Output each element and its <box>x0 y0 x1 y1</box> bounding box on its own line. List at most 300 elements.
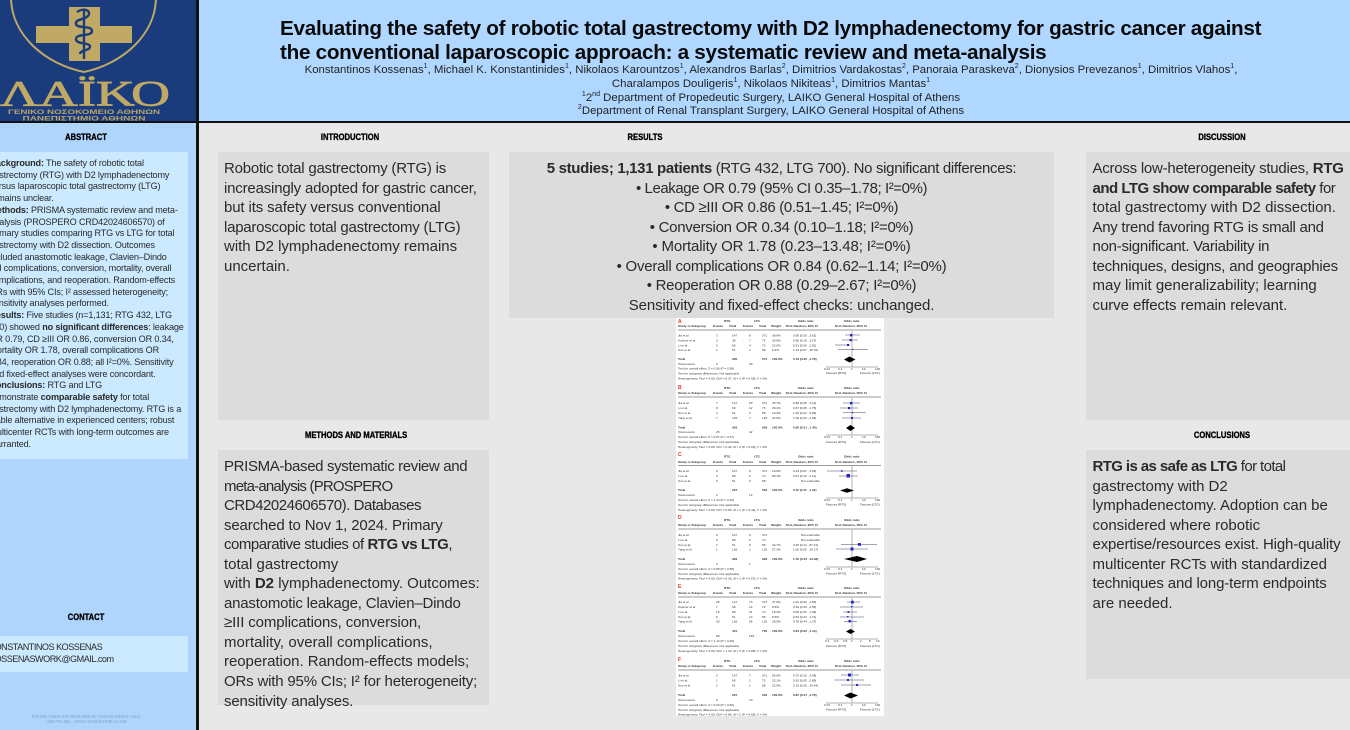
forest plot F: reoperation: 7 <box>749 674 751 678</box>
authors: Charalampos Douligeris1, Nikolaos Nikiteas1, Dimitrios Mantas1 <box>612 77 930 90</box>
forest plot E: overall complications: 700 <box>762 629 767 633</box>
forest plot D: mortality: 100.0% <box>772 557 783 561</box>
forest plot B: complications grade III or above: 10 <box>862 435 866 439</box>
discussion text: Any trend favoring RTG is small and <box>1092 219 1324 236</box>
forest plot C: conversion: 51 <box>732 479 736 483</box>
conclusions text: expertise/resources exist. High-quality <box>1092 536 1340 553</box>
forest plot C: conversion: Total <box>759 460 766 464</box>
forest plot F: reoperation: 0.52 [0.05 , 5.89] <box>793 678 816 682</box>
forest plot D: mortality: 126 <box>762 548 767 552</box>
forest plot E: overall complications: 0.2 <box>834 639 839 643</box>
forest plot D: mortality: Not estimable <box>801 538 820 542</box>
forest plot D: mortality: 393 <box>732 557 737 561</box>
forest plot B: complications grade III or above: 100.0% <box>772 426 783 430</box>
forest plot C: conversion: M-H, Random, 95% CI <box>786 460 818 464</box>
logo subtitle: ΓΕΝΙΚΟ ΝΟΣΟΚΟΜΕΙΟ ΑΘΗΝΩΝ <box>8 109 161 116</box>
forest plot E: overall complications: 431 <box>732 629 737 633</box>
forest plot A: leakage: 69 <box>732 344 736 348</box>
forest plot D: mortality: Test for overall effect: Z = 0.55 (P = 0.58) <box>678 567 734 571</box>
forest plot A: leakage: 1 <box>749 348 751 352</box>
forest plot C: conversion: Not estimable <box>801 479 820 483</box>
forest plot B: complications grade III or above: 58 <box>762 411 766 415</box>
forest plot B: complications grade III or above: 20 <box>749 401 753 405</box>
forest plot B: complications grade III or above: M-H, Random, 95% CI <box>786 391 818 395</box>
forest plot D: mortality: 1.78 [0.23 , 13.48] <box>793 557 818 561</box>
results text: • CD ≥III OR 0.86 (0.51–1.45; I²=0%) <box>665 199 898 216</box>
forest plot F: reoperation: 0.1 <box>838 703 843 707</box>
forest plot C: conversion: 267 <box>732 488 737 492</box>
forest plot A: leakage: 6.4% <box>772 348 779 352</box>
methods text: PRISMA-based systematic review and <box>224 458 467 475</box>
forest plot A: leakage: 1.14 [0.07 , 18.70] <box>793 348 818 352</box>
results text: • Mortality OR 1.78 (0.23–13.48; I²=0%) <box>652 238 911 255</box>
icon: staff and serpent <box>76 9 92 59</box>
discussion text: and LTG show comparable safety for <box>1092 180 1335 197</box>
forest plot D: mortality: D <box>678 515 682 521</box>
introduction text: with D2 lymphadenectomy remains <box>224 238 457 255</box>
forest plot B: complications grade III or above: B <box>678 385 682 391</box>
forest plot E: overall complications: 13 <box>749 615 753 619</box>
panel: methods and materials <box>218 450 489 705</box>
forest plot E: overall complications: 1.01 [0.62 , 1.65] <box>793 600 816 604</box>
forest plot E: overall complications: Total events: <box>678 634 696 638</box>
forest plot F: reoperation: 73 <box>762 678 766 682</box>
forest plot A: leakage: M-H, Random, 95% CI <box>835 324 867 328</box>
title: Evaluating the safety of robotic total gastrectomy with D2 lymphadenectomy for gastric cancer against <box>280 17 1261 40</box>
forest plot D: mortality: 1 <box>716 548 718 552</box>
forest plot A: leakage: A <box>678 319 682 325</box>
forest plot A: leakage: 38 <box>732 338 736 342</box>
forest plot D: mortality: 0 <box>749 543 751 547</box>
forest plot A: leakage: 20 <box>749 362 753 366</box>
forest plot E: overall complications: LTG <box>754 586 761 590</box>
forest plot B: complications grade III or above <box>678 385 881 449</box>
panel: discussion <box>1086 152 1350 420</box>
heading: methods and materials: METHODS AND MATERIALS <box>305 430 407 440</box>
forest plot A: leakage: 8 <box>749 334 751 338</box>
forest plot B: complications grade III or above: 126 <box>762 416 767 420</box>
hospital logo <box>0 0 196 121</box>
forest plot E: overall complications: Odds ratio <box>844 586 860 590</box>
forest plot E: overall complications: 0.1 <box>825 639 830 643</box>
forest plot D: mortality: Jia et al. <box>678 533 690 537</box>
forest plot B: complications grade III or above: 8 <box>716 406 718 410</box>
forest plot D: mortality <box>678 515 881 580</box>
forest plot D: mortality: Study or Subgroup <box>678 523 706 527</box>
forest plot F: reoperation: Li et al. <box>678 678 688 682</box>
authors: 2Department of Renal Transplant Surgery, LAIKO General Hospital of Athens <box>578 104 964 117</box>
methods text: anastomotic leakage, Clavien–Dindo <box>224 595 461 612</box>
forest plot F: reoperation: Total <box>678 693 685 697</box>
forest plot E: overall complications: 7 <box>716 605 718 609</box>
forest plot A: leakage: Odds ratio <box>798 319 814 323</box>
discussion text: Across low-heterogeneity studies, RTG <box>1092 160 1344 177</box>
heading: abstract: ABSTRACT <box>65 132 107 142</box>
forest plot B: complications grade III or above: 0.86 [0.51 , 1.45] <box>793 426 817 430</box>
forest plot F: reoperation: Events <box>743 664 753 668</box>
forest plot D: mortality: RTG <box>724 518 731 522</box>
forest plot B: complications grade III or above: Test for subgroup differences: Not applicable <box>678 440 739 444</box>
forest plot C: conversion <box>678 452 881 512</box>
forest plot A: leakage: 38.6% <box>772 334 781 338</box>
forest plot C: conversion: 6 <box>749 474 751 478</box>
forest plot F: reoperation: Odds ratio <box>798 659 814 663</box>
forest plot F: reoperation: 2 <box>749 678 751 682</box>
discussion text: may limit generalizability; learning <box>1092 277 1317 294</box>
introduction text <box>224 160 477 275</box>
forest plot A: leakage: 0.51 [0.09 , 2.91] <box>793 344 816 348</box>
forest plot A: leakage: Total events: <box>678 362 696 366</box>
forest plot E: overall complications: 28 <box>716 600 720 604</box>
forest plot E: overall complications: 154 <box>749 634 754 638</box>
forest plot B: complications grade III or above: 3 <box>716 411 718 415</box>
forest plot C: conversion: 14 <box>749 493 753 497</box>
forest plot C: conversion: 147 <box>732 469 737 473</box>
forest plot A: leakage: 72 <box>762 338 766 342</box>
forest plot D: mortality: Yang et al. <box>678 548 693 552</box>
results text: • Leakage OR 0.79 (95% CI 0.35–1.78; I²=0%) <box>636 180 927 197</box>
forest plot B: complications grade III or above: 0.01 <box>824 435 830 439</box>
title: the conventional laparoscopic approach: a systematic review and meta-analysis <box>280 41 1046 64</box>
forest plot F: reoperation: Favours [LTG] <box>860 708 880 712</box>
forest plot E: overall complications: 9.6% <box>772 615 779 619</box>
forest plot D: mortality: 1.00 [0.06 , 16.17] <box>793 548 818 552</box>
forest plot A: leakage: Total <box>759 324 766 328</box>
forest plot F: reoperation: Test for overall effect: Z = 0.23 (P = 0.82) <box>678 703 734 707</box>
panel: conclusions <box>1086 450 1350 679</box>
forest plot A: leakage: Study or Subgroup <box>678 324 706 328</box>
forest plot B: complications grade III or above: 393 <box>732 426 737 430</box>
forest plot A: leakage: 33.0% <box>772 338 781 342</box>
discussion text: curve effects remain relevant. <box>1092 297 1287 314</box>
panel: contact <box>0 636 188 672</box>
methods text: reoperation. Random-effects models; <box>224 653 469 670</box>
forest plot D: mortality: Son et al. <box>678 543 691 547</box>
discussion text <box>1092 160 1344 314</box>
forest plot B: complications grade III or above: 7 <box>716 416 718 420</box>
methods text: sensitivity analyses. <box>224 693 353 710</box>
forest plot F: reoperation: LTG <box>754 659 761 663</box>
forest plot C: conversion: 0.40 [0.11 , 1.42] <box>793 488 816 492</box>
forest plot E: overall complications <box>678 584 881 653</box>
forest plot E: overall complications: 30 <box>716 620 720 624</box>
forest plot E: overall complications: Favours [RTG] <box>826 644 846 648</box>
forest plot B: complications grade III or above: 69 <box>732 406 736 410</box>
forest plot D: mortality: Events <box>713 523 723 527</box>
authors: 12nd Department of Propedeutic Surgery, LAIKO General Hospital of Athens <box>582 91 960 104</box>
forest plot F: reoperation: 0.72 [0.15 , 3.49] <box>793 674 816 678</box>
results text: Sensitivity and fixed-effect checks: unchanged. <box>629 297 934 314</box>
forest plot E: overall complications: 28.5% <box>772 620 781 624</box>
forest plot F: reoperation: 58 <box>762 684 766 688</box>
forest plot A: leakage: 22.0% <box>772 344 781 348</box>
forest plot A: leakage: Koelzer et al. <box>678 338 696 342</box>
forest plot B: complications grade III or above: Odds ratio <box>844 386 860 390</box>
forest plot D: mortality: 3.46 [0.14 , 87.21] <box>793 543 818 547</box>
forest plot E: overall complications: M-H, Random, 95% CI <box>835 591 867 595</box>
forest plot C: conversion: 0.01 <box>824 498 830 502</box>
forest plot B: complications grade III or above: 0.88 [0.36 , 2.12] <box>793 401 816 405</box>
conclusions text: RTG is as safe as LTG for total <box>1092 458 1285 475</box>
forest plot C: conversion: 3 <box>716 474 718 478</box>
panel: results <box>509 152 1054 318</box>
methods text: searched to Nov 1, 2024. Primary <box>224 517 443 534</box>
discussion text: non-significant. Variability in <box>1092 238 1269 255</box>
forest plot A: leakage: 0.1 <box>838 367 843 371</box>
forest plot B: complications grade III or above: Total events: <box>678 430 696 434</box>
forest plot C: conversion: 100.0% <box>772 488 783 492</box>
forest plot D: mortality: Not estimable <box>801 533 820 537</box>
forest plot D: mortality: LTG <box>754 518 761 522</box>
heading: introduction: INTRODUCTION <box>321 132 379 142</box>
forest plot E: overall complications: Li et al. <box>678 610 688 614</box>
forest plot C: conversion: Events <box>713 460 723 464</box>
forest plot F: reoperation: Favours [RTG] <box>826 708 846 712</box>
forest plot E: overall complications: 0.69 [0.32 , 1.48] <box>793 610 816 614</box>
forest plot D: mortality: 69 <box>732 538 736 542</box>
forest plot A: leakage: 0.95 [0.25 , 3.61] <box>793 334 816 338</box>
forest plot A: leakage: Test for subgroup differences: Not applicable <box>678 372 739 376</box>
forest plot E: overall complications: Total <box>678 629 685 633</box>
forest plot C: conversion: 1 <box>851 498 853 502</box>
forest plot E: overall complications: 1 <box>851 639 853 643</box>
forest plot E: overall complications: 0.78 [0.44 , 1.37] <box>793 620 816 624</box>
forest plot A: leakage: LTG <box>754 319 761 323</box>
introduction text: Robotic total gastrectomy (RTG) is <box>224 160 446 177</box>
forest plot F: reoperation: Jia et al. <box>678 674 690 678</box>
logo wordmark: ΛΑΪΚΟ <box>0 74 170 114</box>
forest plot F: reoperation: 23.1% <box>772 678 781 682</box>
forest plot E: overall complications: Test for overall effect: Z = 1.12 (P = 0.26) <box>678 639 734 643</box>
forest plot C: conversion: Favours [LTG] <box>860 502 880 506</box>
forest plot A: leakage: Heterogeneity: Tau² = 0.00; Chi² = 0.37, df = 3 (P = 0.95); I² = 0% <box>678 376 767 380</box>
forest plot E: overall complications: 5 <box>869 639 871 643</box>
forest plot E: overall complications: Events <box>743 591 753 595</box>
forest plot E: overall complications: 89 <box>716 634 720 638</box>
template credit <box>32 714 140 724</box>
forest plot B: complications grade III or above: 628 <box>762 426 767 430</box>
forest plot E: overall complications: Favours [LTG] <box>860 644 880 648</box>
forest plot F: reoperation: 0.01 <box>824 703 830 707</box>
forest plot A: leakage: Events <box>743 324 753 328</box>
forest plot F: reoperation: 1 <box>851 703 853 707</box>
forest plot F: reoperation: Total <box>759 664 766 668</box>
forest plot C: conversion: 19.9% <box>772 469 781 473</box>
forest plot C: conversion: M-H, Random, 95% CI <box>835 460 867 464</box>
discussion text: techniques, designs, and geographies <box>1092 258 1338 275</box>
forest plot D: mortality: Odds ratio <box>798 518 814 522</box>
forest plot E: overall complications: RTG <box>724 586 731 590</box>
forest plot E: overall complications: 58 <box>762 615 766 619</box>
left sidebar background <box>0 123 196 730</box>
header band <box>199 0 1350 121</box>
introduction text: uncertain. <box>224 258 290 275</box>
forest plot D: mortality: 100 <box>875 567 880 571</box>
forest plot A: leakage: 371 <box>762 334 767 338</box>
forest plot C: conversion: Weight <box>771 460 781 464</box>
methods text: ORs with 95% CIs; I² for heterogeneity; <box>224 673 477 690</box>
forest plot A: leakage: 3 <box>716 334 718 338</box>
forest plot F: reoperation: 2 <box>716 674 718 678</box>
results text: • Conversion OR 0.34 (0.10–1.18; I²=0%) <box>650 219 913 236</box>
header divider <box>0 121 1350 123</box>
authors: Konstantinos Kossenas1, Michael K. Konstantinides1, Nikolaos Karountzos1, Alexandros Barlas2, Dimitrios Vardakostas2, Panoraia Paraskeva2, Dionysios Prevezanos1, Dimitrios Vlahos1, <box>305 63 1237 76</box>
forest plot F: reoperation: 5 <box>716 698 718 702</box>
forest plot F: reoperation: 147 <box>732 674 737 678</box>
conclusions text: techniques and long-term endpoints <box>1092 575 1327 592</box>
forest plot D: mortality: 628 <box>762 557 767 561</box>
forest plot E: overall complications: 2 <box>860 639 862 643</box>
forest plot D: mortality: 1 <box>851 567 853 571</box>
forest plot A: leakage: 147 <box>732 334 737 338</box>
forest plot B: complications grade III or above: 1.00 [0.34 , 2.94] <box>793 416 816 420</box>
forest plot F: reoperation: 22.9% <box>772 684 781 688</box>
heading: results: RESULTS <box>628 132 662 142</box>
forest plot B: complications grade III or above: Son et al. <box>678 411 691 415</box>
forest plot D: mortality: 126 <box>732 548 737 552</box>
forest plot F: reoperation: Total events: <box>678 698 696 702</box>
icon: shield outline <box>11 0 156 72</box>
forest plot C: conversion: 69 <box>732 474 736 478</box>
forest plot F: reoperation: Events <box>713 664 723 668</box>
forest plot E: overall complications: 72 <box>762 605 766 609</box>
forest plot D: mortality: 0 <box>716 538 718 542</box>
forest plot D: mortality: Events <box>743 523 753 527</box>
forest plot B: complications grade III or above: Yang et al. <box>678 416 693 420</box>
forest plot D: mortality: 0.01 <box>824 567 830 571</box>
forest plot C: conversion: 3 <box>716 493 718 497</box>
panel: abstract <box>0 152 188 459</box>
results text <box>547 160 1016 314</box>
forest plot A: leakage: 73 <box>762 344 766 348</box>
forest plot B: complications grade III or above: 7 <box>716 401 718 405</box>
forest plot B: complications grade III or above: 371 <box>762 401 767 405</box>
forest plot A: leakage: 58 <box>762 348 766 352</box>
forest plot D: mortality: 0 <box>716 533 718 537</box>
forest plot E: overall complications: Study or Subgroup <box>678 591 706 595</box>
forest plot D: mortality: M-H, Random, 95% CI <box>786 523 818 527</box>
forest plot A: leakage: 100 <box>875 367 880 371</box>
forest plot C: conversion: C <box>678 452 682 458</box>
forest plot C: conversion: Odds ratio <box>798 454 814 458</box>
forest plot C: conversion: 80.1% <box>772 474 781 478</box>
forest plot E: overall complications: 51 <box>732 615 736 619</box>
forest plot B: complications grade III or above: 147 <box>732 401 737 405</box>
forest plot B: complications grade III or above: Events <box>743 391 753 395</box>
forest plot B: complications grade III or above: Li et al. <box>678 406 688 410</box>
forest plots <box>676 318 884 716</box>
forest plot D: mortality: 0.1 <box>838 567 843 571</box>
forest plot D: mortality: Total <box>729 523 736 527</box>
forest plot B: complications grade III or above: 30.1% <box>772 406 781 410</box>
forest plot D: mortality: 0 <box>749 538 751 542</box>
results text: • Reoperation OR 0.88 (0.29–2.67; I²=0%) <box>647 277 916 294</box>
forest plot D: mortality: 10 <box>862 567 866 571</box>
forest plot C: conversion: 0 <box>749 479 751 483</box>
methods text: with D2 lymphadenectomy. Outcomes: <box>224 575 480 592</box>
forest plot A: leakage: Odds ratio <box>844 319 860 323</box>
forest plot A: leakage: Jia et al. <box>678 334 690 338</box>
forest plot C: conversion: Test for overall effect: Z = 1.42 (P = 0.15) <box>678 498 734 502</box>
forest plot C: conversion: 502 <box>762 488 767 492</box>
forest plot C: conversion: Total <box>729 460 736 464</box>
forest plot B: complications grade III or above: 1 <box>851 435 853 439</box>
forest plot E: overall complications: 70 <box>749 600 753 604</box>
forest plot C: conversion: 100 <box>875 498 880 502</box>
forest plot A: leakage: 2 <box>716 344 718 348</box>
forest plot C: conversion: RTG <box>724 454 731 458</box>
forest plot A: leakage: RTG <box>724 319 731 323</box>
forest plot F: reoperation: 100 <box>875 703 880 707</box>
forest plot B: complications grade III or above: 51 <box>732 411 736 415</box>
forest plot F: reoperation: 1 <box>749 684 751 688</box>
forest plot E: overall complications: 0.94 [0.34 , 2.56] <box>793 605 816 609</box>
conclusions text <box>1092 458 1341 612</box>
forest plot E: overall complications: Test for subgroup differences: Not applicable <box>678 644 739 648</box>
forest plot C: conversion: 0.14 [0.01 , 2.53] <box>793 469 816 473</box>
forest plot D: mortality: 1 <box>716 543 718 547</box>
conclusions text: are needed. <box>1092 595 1173 612</box>
forest plot E: overall complications: 37.9% <box>772 600 781 604</box>
conclusions text: lymphadenectomy. Adoption can be <box>1092 497 1328 514</box>
forest plot D: mortality: Favours [RTG] <box>826 572 846 576</box>
methods text: CRD42024606570). Databases <box>224 497 421 514</box>
methods text: total gastrectomy <box>224 556 338 573</box>
forest plot A: leakage: 4 <box>749 344 751 348</box>
forest plot C: conversion: 10 <box>862 498 866 502</box>
forest plot E: overall complications: Weight <box>771 591 781 595</box>
forest plot B: complications grade III or above: 25 <box>716 430 720 434</box>
forest plot B: complications grade III or above: 12 <box>749 406 753 410</box>
forest plot E: overall complications: 0.84 [0.62 , 1.14] <box>793 629 817 633</box>
forest plot A: leakage: Li et al. <box>678 344 688 348</box>
forest plot C: conversion: 0.51 [0.12 , 2.11] <box>793 474 816 478</box>
forest plot C: conversion: 73 <box>762 474 766 478</box>
title <box>280 17 1262 64</box>
forest plot E: overall complications: 69 <box>732 610 736 614</box>
forest plot D: mortality: Odds ratio <box>844 518 860 522</box>
forest plot A: leakage: Total <box>678 357 685 361</box>
forest plot B: complications grade III or above: 0.1 <box>838 435 843 439</box>
discussion text: total gastrectomy with D2 dissection. <box>1092 199 1336 216</box>
forest plot A: leakage: 0.01 <box>824 367 830 371</box>
forest plot A: leakage: 100.0% <box>772 357 783 361</box>
forest plot F: reoperation: Test for subgroup differences: Not applicable <box>678 708 739 712</box>
forest plot E: overall complications: 8.6% <box>772 605 779 609</box>
forest plot A: leakage: Son et al. <box>678 348 691 352</box>
forest plot F: reoperation: 51 <box>732 684 736 688</box>
forest plot F: reoperation: 100.0% <box>772 693 783 697</box>
forest plot E: overall complications: 38 <box>732 605 736 609</box>
forest plot E: overall complications: 21 <box>749 610 753 614</box>
forest plot A: leakage: 574 <box>762 357 767 361</box>
heading: discussion: DISCUSSION <box>1198 132 1246 142</box>
forest plot D: mortality: 1 <box>749 562 751 566</box>
forest plot B: complications grade III or above: Events <box>713 391 723 395</box>
forest plot D: mortality: 147 <box>732 533 737 537</box>
forest plot D: mortality: 57.3% <box>772 548 781 552</box>
forest plot C: conversion: Events <box>743 460 753 464</box>
forest plot C: conversion: Study or Subgroup <box>678 460 706 464</box>
forest plot B: complications grade III or above: 73 <box>762 406 766 410</box>
forest plot C: conversion: Heterogeneity: Tau² = 0.00; Chi² = 0.65, df = 1 (P = 0.42); I² = 0% <box>678 508 767 512</box>
forest plot D: mortality: 0 <box>749 533 751 537</box>
forest plot E: overall complications: 14 <box>749 605 753 609</box>
methods text <box>224 458 480 710</box>
forest plot E: overall complications: 100.0% <box>772 629 783 633</box>
forest plot C: conversion: 371 <box>762 469 767 473</box>
forest plot E: overall complications: 371 <box>762 600 767 604</box>
